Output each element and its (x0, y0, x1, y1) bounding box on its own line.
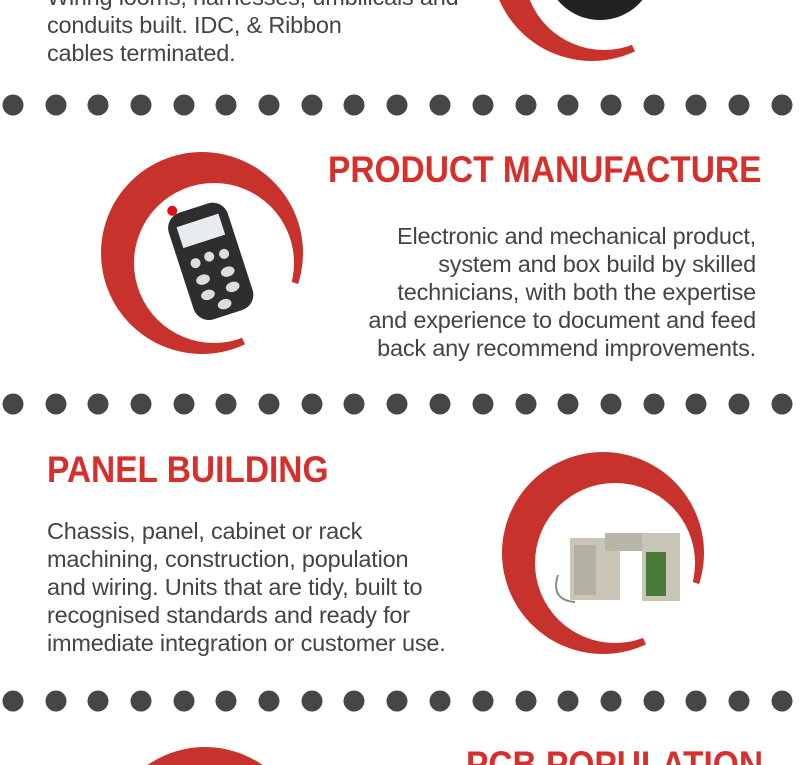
icon: handheld controller (161, 190, 258, 324)
dots row 2 (2, 394, 792, 414)
swoosh: panel building with panel image (493, 443, 713, 663)
text: product manufacture description: back any recommend improvements. (377, 335, 756, 361)
text: cable assemblies description: cables terminated. (47, 40, 235, 66)
text: product manufacture description: technicians, with both the expertise (397, 279, 756, 305)
swoosh: product manufacture with handheld device (92, 143, 312, 363)
dots row 1 (2, 94, 792, 116)
text: panel building description: machining, construction, population (47, 546, 408, 572)
text: panel building description: recognised standards and ready for (47, 602, 410, 628)
heading: panel building: PANEL BUILDING (47, 449, 329, 490)
dots row 3 (2, 690, 792, 712)
text: panel building description: immediate integration or customer use. (47, 630, 446, 656)
text: cable assemblies description (47, 0, 458, 66)
text: product manufacture description (368, 223, 756, 361)
swoosh: top cable (482, 0, 702, 70)
swoosh: pcb population (95, 738, 315, 765)
text: panel building description (47, 518, 446, 656)
text: panel building description: Chassis, panel, cabinet or rack (47, 518, 362, 544)
text: product manufacture description: Electronic and mechanical product, (397, 223, 756, 249)
heading: product manufacture: PRODUCT MANUFACTURE (328, 149, 761, 190)
text: product manufacture description: and experience to document and feed (368, 307, 756, 333)
icon: electrical panel (556, 533, 680, 602)
text: panel building description: and wiring. Units that are tidy, built to (47, 574, 422, 600)
text: product manufacture description: system and box build by skilled (438, 251, 756, 277)
text: cable assemblies description: conduits built. IDC, & Ribbon (47, 12, 342, 38)
